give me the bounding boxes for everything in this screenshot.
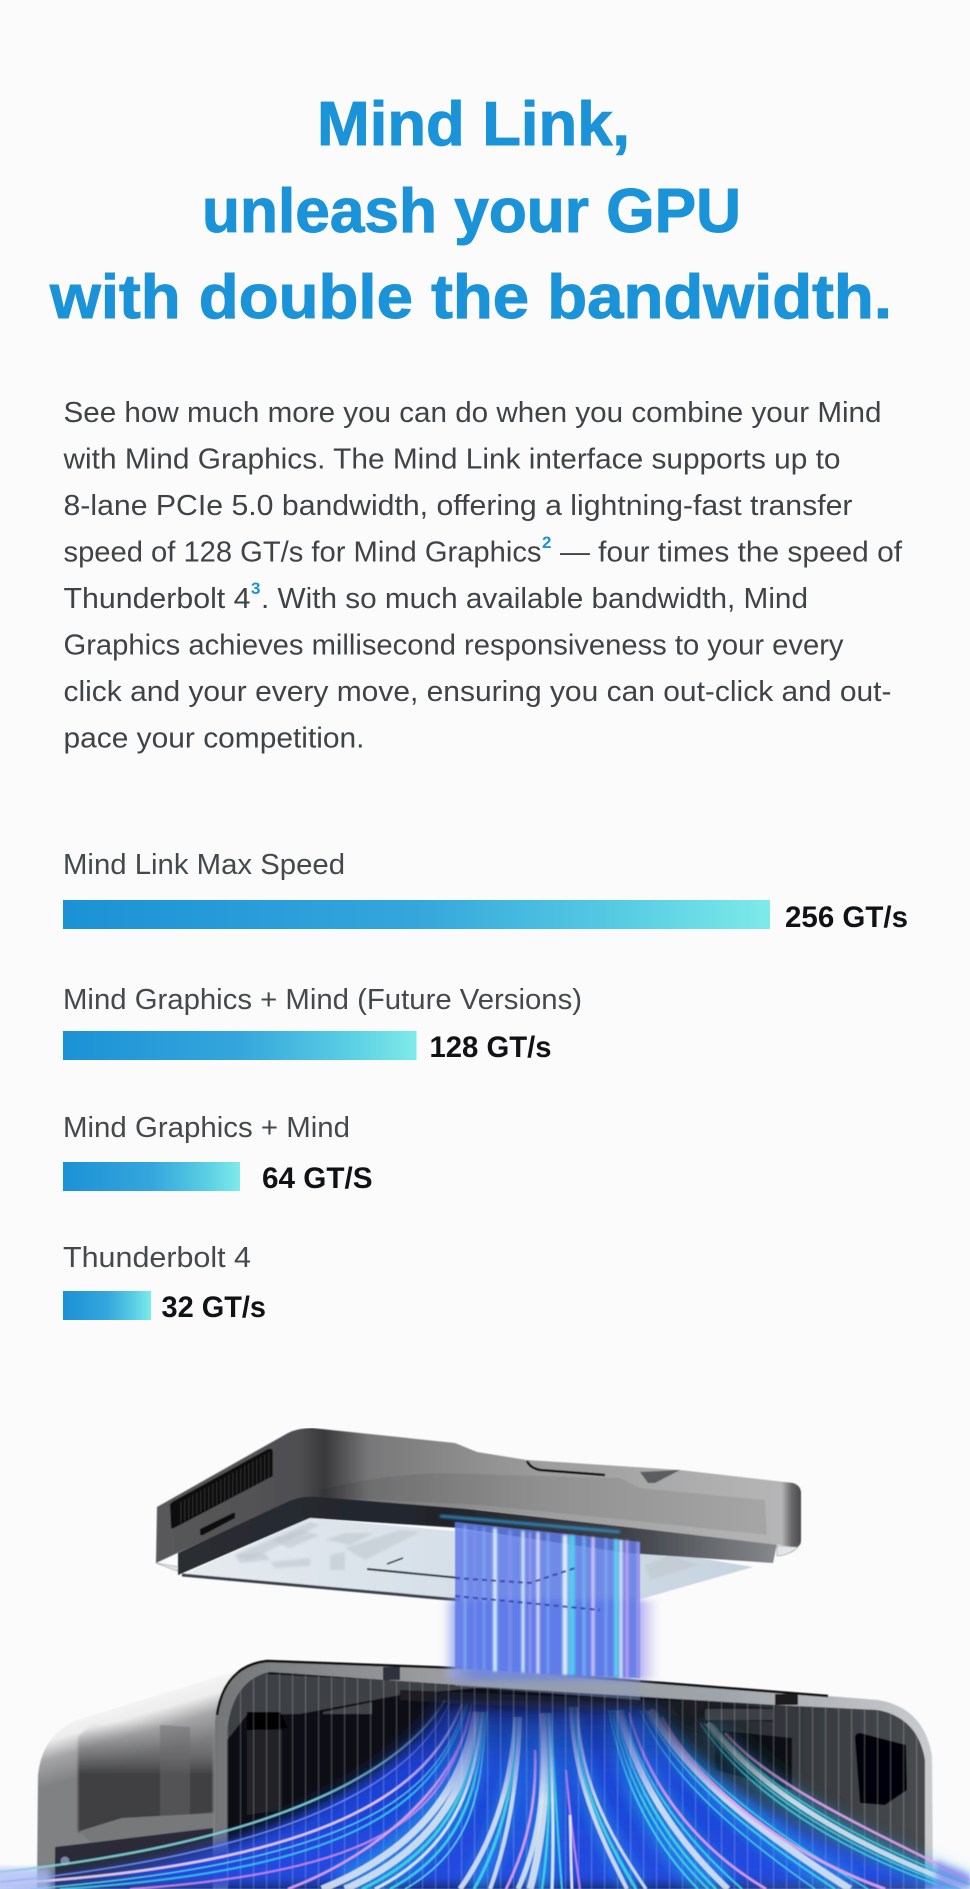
upper dock: dark transparent band [178, 1495, 777, 1575]
bar row: Mind Graphics + Mind (Future Versions): Mind Graphics + Mind (Future Versions) [63, 984, 582, 1016]
body paragraph [62, 397, 902, 754]
body paragraph: Thunderbolt 4 [64, 583, 251, 615]
bar row: Thunderbolt 4: 32 GT/s [162, 1291, 266, 1324]
bar row: Mind Graphics + Mind: 64 GT/S [262, 1162, 372, 1195]
lower unit: faded rear body [37, 1668, 300, 1889]
title: unleash your GPU [202, 177, 741, 246]
stream bundle: center right [566, 1707, 646, 1889]
bar row: Mind Link Max Speed: Mind Link Max Speed [63, 849, 345, 881]
body paragraph: Graphics achieves millisecond responsiveness to your every [64, 630, 844, 662]
cooling fins [227, 1672, 925, 1889]
upper dock: transparent glass base [156, 1518, 798, 1603]
bar row: Mind Graphics + Mind (Future Versions) [63, 984, 582, 1064]
side haze: left and right light glow [0, 1860, 970, 1889]
upper dock: translucent lower panel [320, 1473, 767, 1535]
bar row: Mind Graphics + Mind: Mind Graphics + Mind [63, 1112, 350, 1144]
stream bundle: far right [700, 1723, 970, 1889]
stream bundle: right middle [640, 1710, 885, 1889]
bar row: Mind Link Max Speed [63, 849, 908, 934]
body paragraph: pace your competition. [64, 722, 364, 754]
lower unit: top black edge [217, 1661, 828, 1715]
upper dock: vent [170, 1449, 273, 1529]
bar row: Thunderbolt 4 [63, 1242, 266, 1324]
stream glow [345, 1707, 970, 1889]
upper dock: port slot [200, 1513, 235, 1535]
beam dashed traces [455, 1568, 600, 1610]
body paragraph: 8-lane PCIe 5.0 bandwidth, offering a lightning-fast transfer [64, 490, 853, 522]
stream bundle: right inner [609, 1710, 766, 1889]
beam overlap on lower unit top edge [455, 1668, 640, 1700]
body paragraph: click and your every move, ensuring you can out-click and out- [64, 676, 892, 708]
body paragraph: — four times the speed of [560, 536, 902, 568]
beam core [455, 1522, 640, 1678]
lower unit: inner grey upper area [227, 1672, 907, 1815]
bar chart [63, 849, 908, 1324]
beam top glow line [440, 1516, 620, 1532]
stream bundle: far left [0, 1700, 472, 1889]
bar row: Mind Graphics + Mind (Future Versions): 128 GT/s [430, 1031, 552, 1064]
upper dock: top right step [640, 1470, 680, 1483]
lower unit: notches [383, 1667, 798, 1720]
body paragraph: with Mind Graphics. The Mind Link interface supports up to [62, 444, 840, 476]
bar row: Thunderbolt 4: Thunderbolt 4 [63, 1242, 251, 1274]
bar row: Mind Link Max Speed: 256 GT/s [785, 901, 908, 934]
upper dock: button slot [527, 1461, 605, 1475]
body paragraph: speed of 128 GT/s for Mind Graphics [64, 536, 542, 568]
stream bundle: center [506, 1713, 562, 1889]
bar row: Mind Graphics + Mind [63, 1112, 372, 1195]
lower unit: inner dark face [227, 1672, 925, 1889]
lower unit: front frame [215, 1660, 933, 1889]
body paragraph: 2 [542, 533, 551, 552]
beam glow [442, 1600, 660, 1680]
stream bundle: center left [460, 1717, 520, 1889]
stream bundle: left main [288, 1712, 487, 1889]
title: Mind Link, [317, 90, 630, 159]
body paragraph: See how much more you can do when you combine your Mind [64, 397, 881, 429]
blue data beam [440, 1516, 660, 1680]
title: with double the bandwidth. [49, 263, 892, 332]
upper dock: main body [156, 1428, 801, 1563]
blue light field [0, 1705, 970, 1889]
light streams [0, 1700, 970, 1889]
illustration: Mind Graphics dock and Mind unit [0, 1428, 970, 1889]
body paragraph: 3 [251, 579, 260, 598]
title [49, 90, 892, 332]
beam light stripes [465, 1525, 638, 1678]
body paragraph: . With so much available bandwidth, Mind [261, 583, 808, 615]
